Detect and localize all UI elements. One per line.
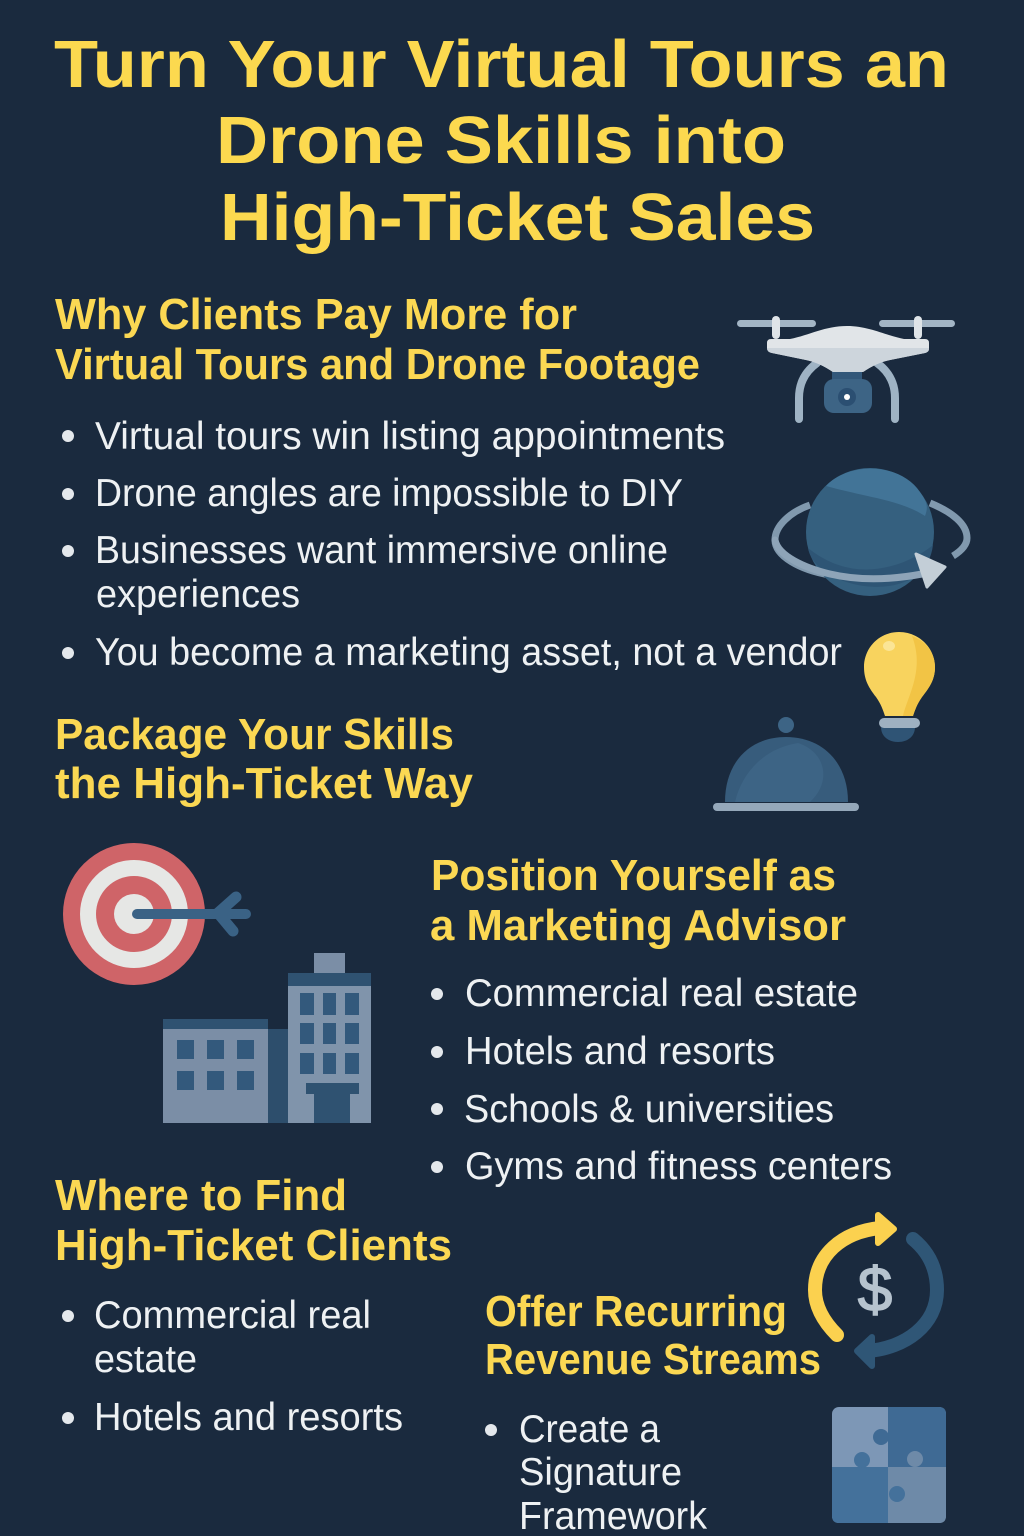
- heading: recurring revenue: Revenue Streams: [485, 1335, 821, 1384]
- icon: target with arrow: [63, 843, 246, 985]
- panel: why clients pay more: [55, 290, 842, 674]
- panel: position yourself as a marketing advisor: [430, 851, 892, 1188]
- heading: marketing advisor: a Marketing Advisor: [430, 901, 846, 950]
- bullet list: reasons: Virtual tours win listing appointments: [95, 415, 725, 458]
- heading: where to find clients: High-Ticket Clients: [55, 1221, 452, 1270]
- bullet list: client types: estate: [94, 1338, 197, 1381]
- panel: package your skills: [55, 710, 859, 811]
- icon: drone: [737, 316, 955, 419]
- title: [54, 27, 949, 255]
- heading: why clients pay more: Why Clients Pay More for: [55, 290, 577, 339]
- heading: package your skills: [55, 710, 474, 808]
- heading: marketing advisor: [430, 851, 846, 950]
- bullet list: recurring offers: Signature: [519, 1451, 682, 1494]
- bullet list: reasons: You become a marketing asset, not a vendor: [95, 631, 842, 674]
- bullet list: markets: Commercial real estate: [465, 972, 858, 1015]
- icon: light bulb: [864, 632, 935, 742]
- heading: marketing advisor: Position Yourself as: [431, 851, 836, 900]
- title: Drone Skills into: [216, 103, 786, 178]
- title: Turn Your Virtual Tours an: [54, 27, 949, 102]
- panel: offer recurring revenue streams: [485, 1287, 821, 1536]
- heading: package your skills: the High-Ticket Way: [55, 759, 474, 808]
- bullet list: markets: Gyms and fitness centers: [465, 1145, 892, 1188]
- bullet list: client types: Hotels and resorts: [94, 1396, 403, 1439]
- bullet list: markets: Schools & universities: [464, 1088, 834, 1131]
- heading: recurring revenue: Offer Recurring: [485, 1287, 787, 1336]
- icon: recurring revenue cycle: [815, 1215, 937, 1366]
- heading: where to find clients: Where to Find: [55, 1171, 347, 1220]
- heading: recurring revenue: [485, 1287, 821, 1384]
- bullet list: reasons: [62, 415, 842, 674]
- bullet list: reasons: experiences: [96, 573, 300, 616]
- heading: why clients pay more: Virtual Tours and Drone Footage: [55, 340, 700, 389]
- dollar sign: $: [858, 1256, 892, 1325]
- bullet list: recurring offers: [485, 1408, 707, 1536]
- icon: globe with orbit arrow: [775, 468, 967, 596]
- title: High-Ticket Sales: [220, 180, 815, 255]
- icon: serving cloche: [713, 717, 859, 811]
- heading: where to find clients: [55, 1171, 452, 1270]
- bullet list: client types: Commercial real: [94, 1294, 371, 1337]
- panel: where to find high-ticket clients: [55, 1171, 452, 1439]
- bullet list: markets: [431, 972, 892, 1188]
- icon: puzzle pieces: [832, 1407, 946, 1523]
- heading: why clients pay more: [55, 290, 700, 389]
- bullet list: reasons: Drone angles are impossible to DIY: [95, 472, 683, 515]
- heading: package your skills: Package Your Skills: [55, 710, 454, 759]
- bullet list: recurring offers: Create a: [519, 1408, 660, 1451]
- bullet list: markets: Hotels and resorts: [465, 1030, 775, 1073]
- bullet list: reasons: Businesses want immersive online: [95, 529, 668, 572]
- bullet list: client types: [62, 1294, 403, 1439]
- icon: office buildings: [163, 953, 371, 1123]
